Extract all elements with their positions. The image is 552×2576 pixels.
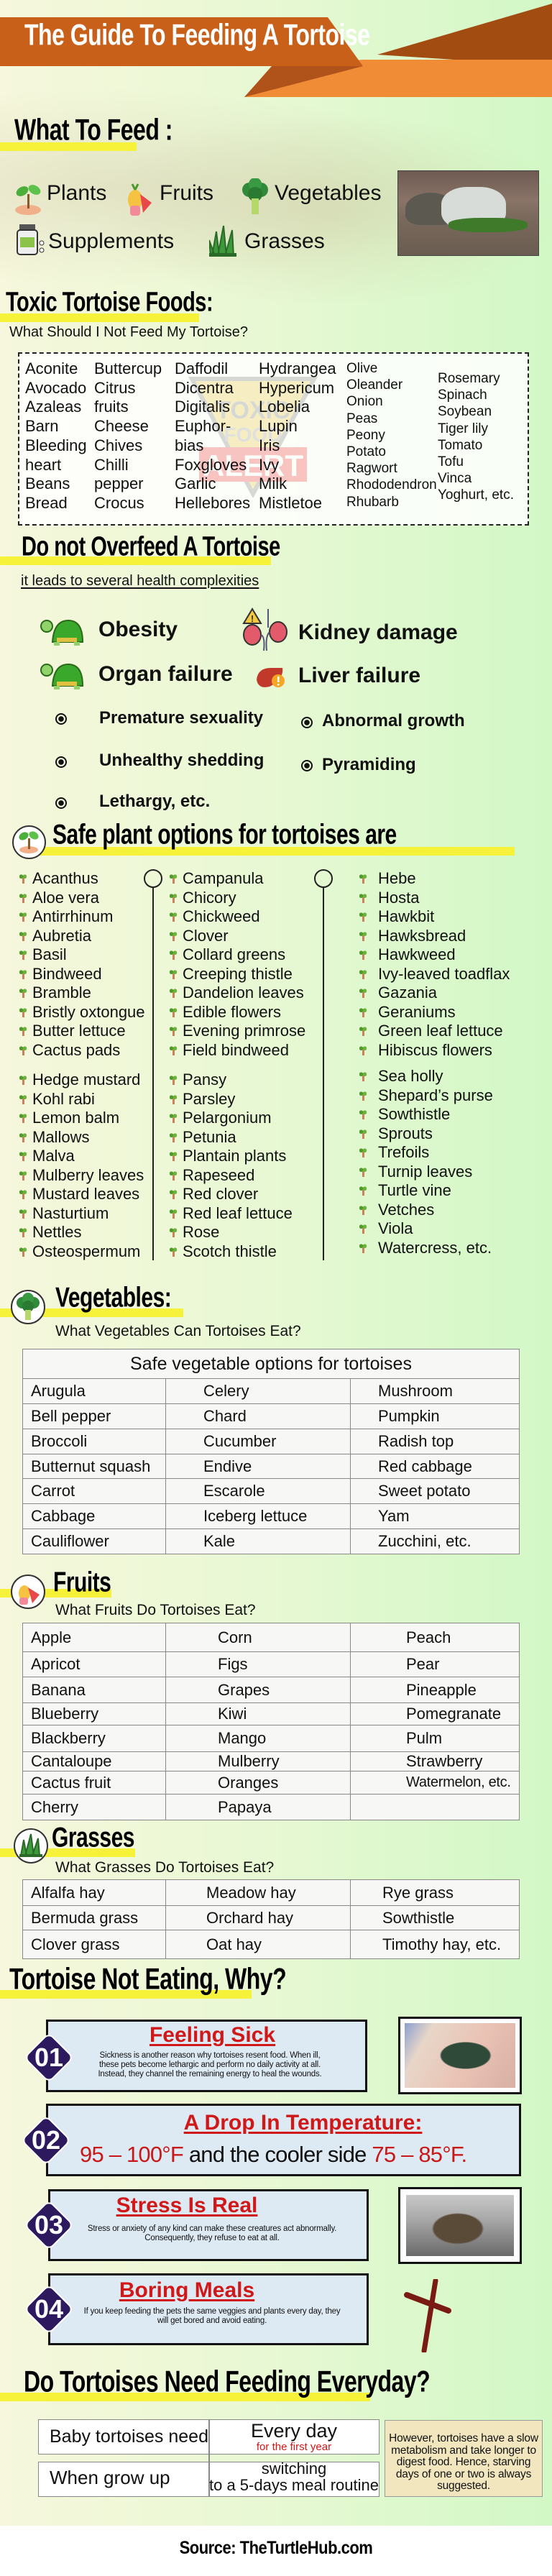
list: safe plants col 1: Lemon balm — [32, 1109, 119, 1127]
text: Potato — [346, 444, 386, 459]
table: grasses: Timothy hay, etc. — [382, 1935, 501, 1953]
text: Soybean — [438, 404, 492, 419]
table: vegetables — [22, 1349, 520, 1554]
list: safe plants col 1: Cactus pads — [32, 1041, 120, 1058]
photo: tortoise eating vegetables — [397, 170, 539, 256]
text: Rhododendron — [346, 477, 437, 492]
icon: broccoli — [242, 178, 268, 214]
heading: do not overfeed: Do not Overfeed A Tortoise — [22, 532, 280, 562]
table: fruits: Figs — [218, 1655, 248, 1673]
badge 02: 02 — [32, 2125, 60, 2155]
table: vegetables: Arugula — [31, 1382, 86, 1400]
table: fruits: Pear — [406, 1655, 439, 1673]
title: The Guide To Feeding A Tortoise — [24, 18, 369, 52]
list: safe plants col 2: Collard greens — [183, 945, 285, 963]
table: grasses: Clover grass — [31, 1935, 119, 1953]
subtitle grasses: What Grasses Do Tortoises Eat? — [55, 1859, 274, 1876]
list: safe plants col 1: Nasturtium — [32, 1204, 109, 1222]
icon: toxic food alert watermark: ALERT — [203, 449, 303, 482]
table: vegetables: Pumpkin — [378, 1407, 440, 1425]
list: safe plants col 2: Dandelion leaves — [183, 984, 304, 1001]
card 02: drop in temperature — [46, 2104, 521, 2176]
badge 03: 03 — [34, 2210, 63, 2240]
badge 01 — [26, 2035, 72, 2081]
table: fruits: Watermelon, etc. — [406, 1774, 511, 1790]
list: safe plants col 2: Parsley — [183, 1090, 235, 1107]
table: vegetables: Broccoli — [31, 1432, 87, 1450]
list: safe plants col 2: Red clover — [183, 1185, 258, 1203]
list: safe plants col 3: Gazania — [378, 984, 437, 1001]
list: safe plants col 3: Watercress, etc. — [378, 1238, 492, 1257]
table: fruits: Papaya — [218, 1797, 272, 1816]
card 03: stress is real — [48, 2189, 369, 2261]
list: safe plants col 2: Campanula — [183, 869, 264, 887]
list: safe plants col 3: Viola — [378, 1219, 413, 1237]
text: Digitalis — [175, 398, 230, 416]
subtitle toxic: What Should I Not Feed My Tortoise? — [9, 324, 248, 340]
icon: fruits — [128, 183, 152, 216]
icon: liver — [257, 668, 285, 687]
table: fruits: Pomegranate — [406, 1705, 501, 1723]
table: fruits: Pulm — [406, 1729, 442, 1747]
table: grasses: Rye grass — [382, 1884, 454, 1901]
list: safe plants col 3: Ivy-leaved toadflax — [378, 965, 510, 982]
text: bias — [175, 436, 203, 454]
panel: health complexities: Liver failure — [298, 664, 420, 687]
list: safe plants col 1: Antirrhinum — [32, 907, 113, 925]
icon: plant — [15, 185, 41, 215]
heading: what to feed: What To Feed : — [14, 113, 172, 147]
table: vegetables: Carrot — [31, 1482, 75, 1500]
list: safe plants col 3: Sowthistle — [378, 1105, 450, 1123]
list: safe plants col 3: Turtle vine — [378, 1181, 451, 1199]
heading: grasses — [0, 1823, 135, 1864]
text: Hydrangea — [259, 359, 336, 377]
table: fruits: Kiwi — [218, 1705, 247, 1723]
bullet list — [55, 713, 67, 725]
text: Buttercup — [94, 359, 162, 377]
icon: kidney — [242, 608, 288, 651]
table: feeding schedule: Every day — [251, 2420, 337, 2442]
list: safe plants col 3: Green leaf lettuce — [378, 1022, 503, 1040]
panel: toxic foods list — [18, 352, 529, 526]
text: Oleander — [346, 377, 402, 393]
card title: Feeling Sick — [150, 2023, 275, 2047]
panel: health complexities: Premature sexuality — [99, 708, 263, 728]
list: safe plants col 2: Rose — [183, 1223, 219, 1241]
list: safe plants col 1: Butter lettuce — [32, 1022, 126, 1040]
list: safe plants col 3: Hawkweed — [378, 945, 456, 963]
table: vegetables: Bell pepper — [31, 1407, 111, 1425]
list: safe plants col 1: Basil — [32, 945, 67, 963]
faded background photo blobs — [0, 72, 552, 302]
text: Chilli — [94, 456, 129, 474]
heading: safe plant options: Safe plant options for tortoises are — [52, 820, 397, 851]
table: vegetables: Cabbage — [31, 1507, 95, 1525]
text: Spinach — [438, 388, 487, 403]
heading: grasses: Grasses — [52, 1823, 134, 1853]
photo: sick tortoise — [398, 2017, 522, 2094]
text: Foxgloves — [175, 456, 247, 474]
panel: health complexities: Lethargy, etc. — [99, 792, 210, 811]
icon: fruits — [11, 1575, 45, 1609]
table: grasses: Oat hay — [206, 1935, 262, 1953]
list: safe plants col 1: Malva — [32, 1147, 75, 1165]
what to feed items: Supplements — [48, 229, 174, 253]
table: fruits: Cactus fruit — [31, 1773, 111, 1792]
table: grasses — [22, 1879, 520, 1959]
text: Chives — [94, 436, 142, 454]
heading: tortoise not eating: Tortoise Not Eating, Why? — [9, 1962, 286, 1996]
text: Euphor- — [175, 417, 231, 435]
what to feed items: Vegetables — [275, 181, 381, 205]
text: Tofu — [438, 454, 464, 469]
list: safe plants col 1 — [19, 869, 145, 1260]
icon: toxic food alert watermark: FOOD — [224, 423, 282, 446]
list: safe plants col 3: Sprouts — [378, 1124, 433, 1142]
text: Ragwort — [346, 461, 397, 476]
list: safe plants col 2: Edible flowers — [183, 1002, 281, 1021]
list: safe plants col 2: Evening primrose — [183, 1022, 305, 1040]
icon: grasses — [209, 226, 236, 257]
list: safe plants col 1: Kohl rabi — [32, 1090, 95, 1107]
list: safe plants col 3: Geraniums — [378, 1002, 456, 1021]
table: fruits: Apricot — [31, 1655, 80, 1673]
table: feeding schedule — [38, 2419, 380, 2497]
text: Hypericum — [259, 379, 334, 397]
heading: toxic foods: Toxic Tortoise Foods: — [6, 288, 213, 318]
panel: health complexities: Pyramiding — [322, 755, 416, 774]
table: vegetables: Endive — [203, 1457, 252, 1475]
heading: vegetables: Vegetables: — [55, 1283, 171, 1314]
table: fruits: Blackberry — [31, 1729, 106, 1747]
text: Rosemary — [438, 371, 500, 386]
heading: feeding everyday: Do Tortoises Need Feeding Everyday? — [24, 2365, 430, 2398]
icon: turtle — [40, 620, 83, 646]
badge 03 — [26, 2202, 72, 2248]
text: Milk — [259, 475, 287, 492]
text: Bread — [25, 494, 68, 512]
list: safe plants col 2: Creeping thistle — [183, 965, 293, 982]
list: safe plants col 1: Bristly oxtongue — [32, 1002, 145, 1021]
text: Daffodil — [175, 359, 228, 377]
table: fruits: Cantaloupe — [31, 1752, 112, 1770]
card title: A Drop In Temperature: — [184, 2111, 422, 2135]
table: vegetables: Chard — [203, 1407, 247, 1425]
text: Onion — [346, 394, 383, 409]
text: Aconite — [25, 359, 78, 377]
subtitle vegetables: What Vegetables Can Tortoises Eat? — [55, 1323, 301, 1339]
list: safe plants col 2: Plantain plants — [183, 1147, 286, 1165]
list: safe plants col 2: Pansy — [183, 1071, 226, 1088]
text: Rhubarb — [346, 495, 399, 510]
heading: fruits: Fruits — [53, 1567, 111, 1598]
card 04: boring meals — [48, 2273, 369, 2345]
table: grasses: Orchard hay — [206, 1908, 293, 1927]
list: safe plants col 2 — [170, 869, 305, 1260]
table: grasses: Bermuda grass — [31, 1908, 138, 1927]
table: vegetables: Escarole — [203, 1482, 265, 1500]
list: safe plants col 3: Turnip leaves — [378, 1162, 472, 1181]
table: fruits: Mango — [218, 1729, 266, 1747]
text: Azaleas — [25, 398, 81, 416]
card title: Boring Meals — [119, 2278, 254, 2302]
table: fruits: Peach — [406, 1628, 451, 1646]
source: Source: TheTurtleHub.com — [180, 2537, 372, 2558]
heading: vegetables — [0, 1283, 183, 1324]
table: vegetables: Cucumber — [203, 1432, 276, 1450]
icon: toxic food alert watermark: TOXIC — [216, 397, 290, 424]
subtitle overfeed: it leads to several health complexities — [21, 573, 259, 589]
table: fruits: Mulberry — [218, 1752, 280, 1770]
card text: If you keep feeding the pets the same veggies and plants every day, they will get bored and avoid eating. — [84, 2307, 340, 2325]
table: feeding schedule: for the first year — [257, 2441, 331, 2453]
text: Yoghurt, etc. — [438, 487, 514, 503]
panel: health complexities: Organ failure — [98, 662, 233, 686]
table: vegetables: Yam — [378, 1507, 410, 1525]
dividers — [144, 869, 333, 1260]
list: safe plants col 1: Bramble — [32, 984, 91, 1001]
temperature text: 95 – 100°F and the cooler side 75 – 85°F. — [80, 2142, 466, 2167]
heading: safe plant options — [12, 820, 515, 859]
badge 01: 01 — [34, 2043, 63, 2072]
table: feeding schedule: When grow up — [50, 2467, 170, 2488]
text: Cheese — [94, 417, 149, 435]
list: safe plants col 3: Hibiscus flowers — [378, 1041, 492, 1058]
icon: supplements — [17, 224, 45, 255]
what to feed items — [15, 178, 381, 257]
what to feed items: Fruits — [160, 181, 213, 205]
list: safe plants col 1: Mustard leaves — [32, 1185, 139, 1203]
badge 04: 04 — [34, 2294, 63, 2324]
table: vegetables: Safe vegetable options for tortoises — [130, 1353, 412, 1373]
icon: kidney: ! — [251, 613, 254, 624]
table: feeding schedule: to a 5-days meal routine — [209, 2476, 379, 2494]
card 01: feeling sick — [46, 2020, 367, 2092]
table: fruits — [22, 1623, 520, 1820]
list: safe plants col 3: Sea holly — [378, 1067, 443, 1085]
list: safe plants col 1: Mallows — [32, 1127, 89, 1146]
list: safe plants col 3 — [359, 869, 510, 1257]
list: safe plants col 3: Hawkbit — [378, 907, 434, 925]
text: pepper — [94, 475, 144, 492]
callout: slow metabolism: However, tortoises have a slow metabolism and take longer to digest food. Hence, starving days of one or two is always suggested. — [389, 2432, 538, 2492]
table: fruits: Grapes — [218, 1681, 270, 1698]
text: Dicentra — [175, 379, 234, 397]
table: fruits: Oranges — [218, 1773, 278, 1792]
icon: cross mark — [404, 2279, 451, 2352]
list: safe plants col 2: Red leaf lettuce — [183, 1204, 293, 1222]
icon: turtle — [40, 664, 83, 689]
table: vegetables: Kale — [203, 1532, 235, 1550]
table: vegetables: Mushroom — [378, 1382, 453, 1400]
list: safe plants col 3: Vetches — [378, 1201, 434, 1218]
what to feed items: Plants — [47, 181, 106, 205]
icon: toxic food alert watermark — [188, 377, 318, 498]
icon: broccoli — [11, 1290, 45, 1324]
list: safe plants col 2: Chickweed — [183, 907, 260, 925]
list: safe plants col 1: Bindweed — [32, 965, 102, 982]
table: vegetables: Radish top — [378, 1432, 454, 1450]
panel: health complexities: Abnormal growth — [322, 711, 465, 730]
list: safe plants col 2: Rapeseed — [183, 1166, 254, 1183]
table: grasses: Meadow hay — [206, 1884, 296, 1901]
text: Olive — [346, 361, 377, 376]
list: safe plants col 2: Petunia — [183, 1127, 236, 1146]
text: Avocado — [25, 379, 86, 397]
text: Hellebores — [175, 494, 250, 512]
text: Mistletoe — [259, 494, 322, 512]
table: vegetables: Red cabbage — [378, 1457, 472, 1475]
text: Crocus — [94, 494, 144, 512]
text: Lupin — [259, 417, 298, 435]
table: fruits: Cherry — [31, 1797, 78, 1816]
table: grasses: Sowthistle — [382, 1908, 454, 1927]
list: safe plants col 2: Field bindweed — [183, 1041, 289, 1058]
photo: stressed tortoise — [398, 2187, 522, 2264]
title banner — [0, 4, 552, 97]
table: fruits: Corn — [218, 1628, 252, 1646]
what to feed items: Grasses — [244, 229, 325, 253]
table: fruits: Pineapple — [406, 1681, 477, 1698]
card text: Stress or anxiety of any kind can make these creatures act abnormally. Consequently, they refuse to eat at all. — [88, 2224, 336, 2242]
text: heart — [25, 456, 61, 474]
text: Tiger lily — [438, 421, 488, 436]
table: vegetables: Celery — [203, 1382, 249, 1400]
text: Lobelia — [259, 398, 310, 416]
list: safe plants col 2: Scotch thistle — [183, 1242, 277, 1260]
text: Beans — [25, 475, 70, 492]
heading: fruits — [0, 1567, 111, 1609]
icon: plant — [12, 825, 46, 859]
table: vegetables: Iceberg lettuce — [203, 1507, 307, 1525]
table: feeding schedule: Baby tortoises need — [50, 2426, 208, 2447]
panel: health complexities: Obesity — [98, 618, 178, 641]
text: Barn — [25, 417, 58, 435]
table: feeding schedule: switching — [262, 2460, 326, 2478]
text: Citrus — [94, 379, 135, 397]
text: Peas — [346, 411, 377, 426]
list: safe plants col 3: Trefoils — [378, 1143, 429, 1161]
table: vegetables: Cauliflower — [31, 1532, 109, 1550]
table: fruits: Banana — [31, 1681, 86, 1698]
list: safe plants col 3: Shepard’s purse — [378, 1086, 493, 1104]
badge 04 — [26, 2286, 72, 2332]
text: Vinca — [438, 471, 472, 486]
list: safe plants col 1: Mulberry leaves — [32, 1166, 144, 1183]
list: safe plants col 2: Chicory — [183, 889, 236, 906]
list: safe plants col 3: Hebe — [378, 869, 416, 887]
list: safe plants col 3: Hawksbread — [378, 926, 466, 945]
panel: health complexities: Unhealthy shedding — [99, 751, 264, 770]
text: Garlic — [175, 475, 216, 492]
icon: grasses — [14, 1828, 48, 1864]
list: safe plants col 2: Clover — [183, 926, 229, 945]
text: fruits — [94, 398, 129, 416]
list: safe plants col 1: Aubretia — [32, 926, 91, 945]
list: safe plants col 1: Aloe vera — [32, 889, 99, 906]
text: Iris — [259, 436, 280, 454]
text: Ivy — [259, 456, 279, 474]
list: safe plants col 1: Osteospermum — [32, 1242, 140, 1260]
table: vegetables: Zucchini, etc. — [378, 1532, 472, 1550]
list: safe plants col 3: Hosta — [378, 889, 419, 906]
table: fruits: Strawberry — [406, 1752, 482, 1770]
text: Peony — [346, 428, 385, 443]
table: fruits: Apple — [31, 1628, 71, 1646]
table: grasses: Alfalfa hay — [31, 1884, 105, 1901]
text: Bleeding — [25, 436, 87, 454]
card title: Stress Is Real — [116, 2194, 257, 2217]
list: safe plants col 1: Hedge mustard — [32, 1071, 140, 1088]
table: vegetables: Sweet potato — [378, 1482, 470, 1500]
table: fruits: Blueberry — [31, 1705, 98, 1723]
list: safe plants col 1: Nettles — [32, 1223, 81, 1241]
text: Tomato — [438, 438, 482, 453]
subtitle fruits: What Fruits Do Tortoises Eat? — [55, 1602, 256, 1618]
list: safe plants col 2: Pelargonium — [183, 1109, 272, 1127]
table: vegetables: Butternut squash — [31, 1457, 150, 1475]
card text: Sickness is another reason why tortoises resent food. When ill, these pets become lethargic and perform no daily activity at all. Instead, they channel the remaining energy to heal the wounds. — [98, 2051, 322, 2078]
panel: health complexities — [40, 608, 465, 811]
list: safe plants col 1: Acanthus — [32, 869, 98, 887]
panel: health complexities: Kidney damage — [298, 620, 458, 644]
badge 02 — [23, 2117, 69, 2163]
